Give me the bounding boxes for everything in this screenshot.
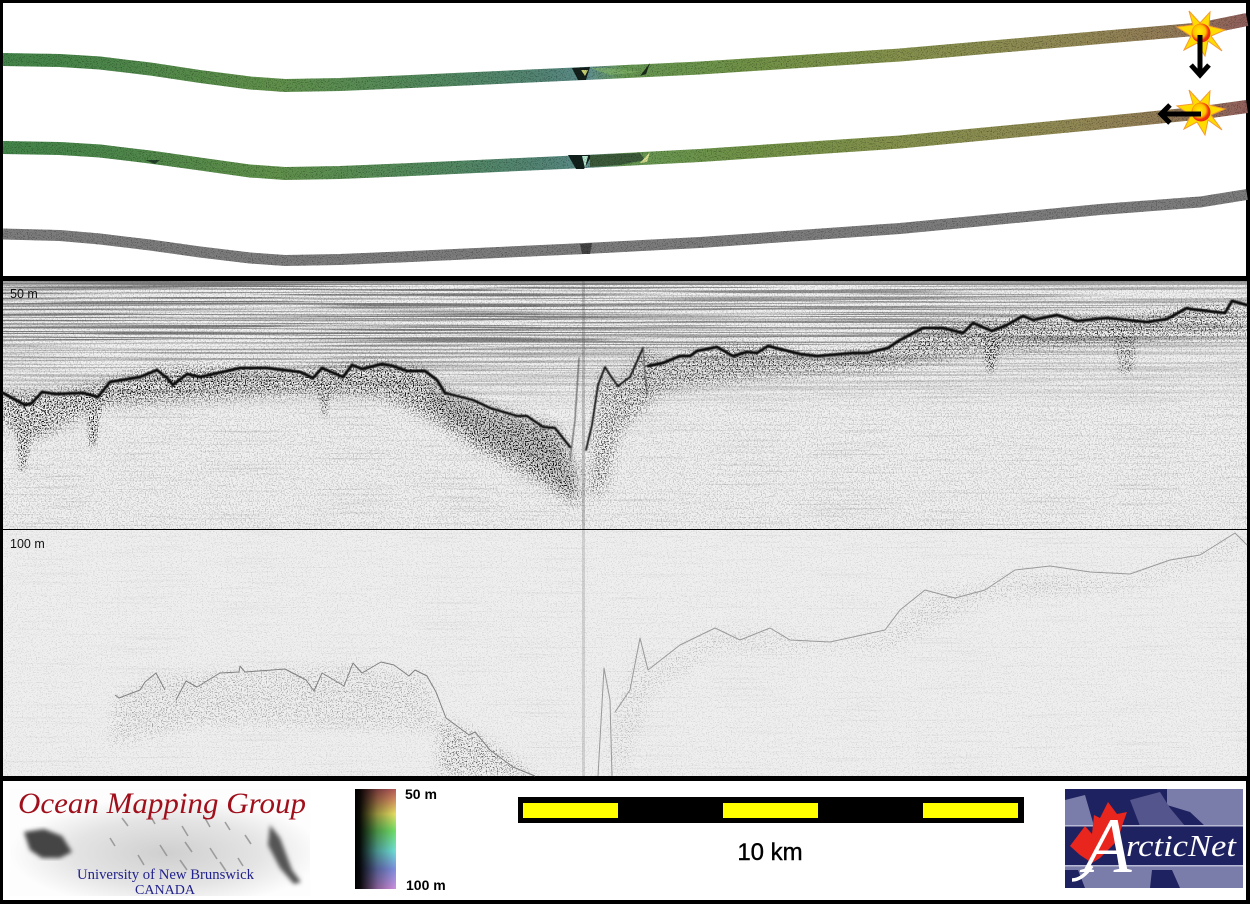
logo wordmark: A	[1079, 802, 1132, 889]
panel: footer	[3, 781, 1246, 900]
icon: top explosion marker	[1177, 11, 1225, 56]
swath: lower colour relief strip	[3, 106, 1247, 174]
legend bottom label: 100 m	[406, 877, 446, 893]
swath: grey backscatter strip	[3, 194, 1247, 260]
logo: ArcticNet	[1065, 789, 1243, 889]
swath: upper colour relief strip	[3, 20, 1247, 86]
depth label 100 m: 100 m	[10, 537, 45, 551]
faint seafloor trace	[115, 533, 1247, 776]
whale silhouette right	[268, 825, 301, 884]
maple leaf	[1070, 802, 1127, 863]
whale silhouette left	[24, 829, 72, 858]
logo: ArcticNet: rcticNet	[1126, 828, 1238, 863]
logo: Ocean Mapping Group	[10, 787, 310, 898]
colour legend	[355, 786, 446, 893]
logo country: CANADA	[135, 883, 196, 898]
seafloor reflector line	[3, 301, 1247, 460]
depth label 50 m: 50 m	[10, 287, 38, 301]
icon: lower explosion marker	[1177, 90, 1225, 135]
legend top label: 50 m	[405, 786, 437, 802]
scale bar	[518, 797, 1024, 866]
arrow: pointing left	[1161, 105, 1201, 123]
panel: swath maps	[0, 0, 1250, 280]
panel: 50 m sub-bottom profile	[3, 281, 1247, 529]
logo heading: Ocean Mapping Group	[18, 787, 306, 820]
logo university name: University of New Brunswick	[77, 867, 255, 883]
scale label: 10 km	[737, 839, 803, 866]
panel: 100 m sub-bottom profile	[3, 530, 1247, 776]
arrow: pointing down	[1191, 35, 1209, 75]
